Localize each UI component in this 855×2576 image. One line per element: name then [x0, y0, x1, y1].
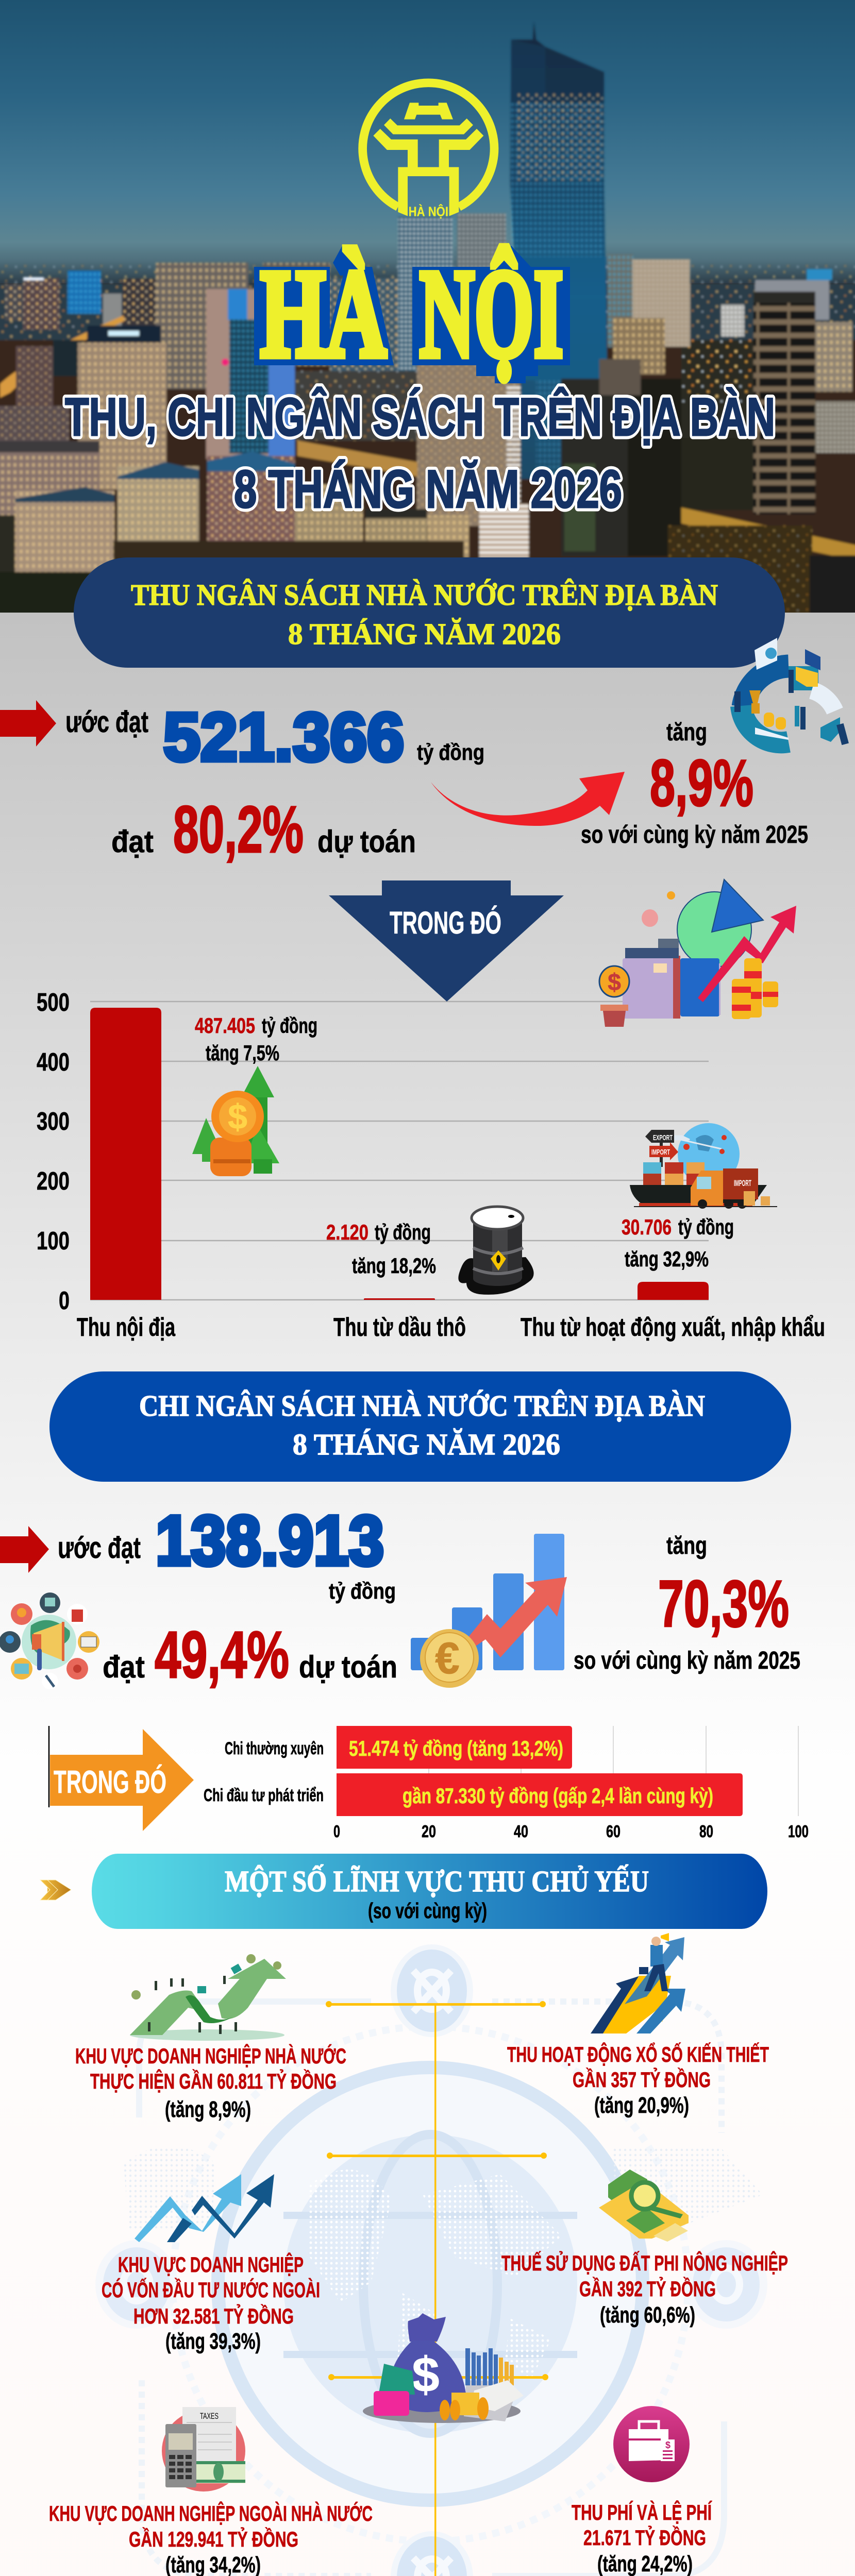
panel: key revenue heading pill [92, 1854, 767, 1929]
icon: import export ship, truck and globe: IMPORT [734, 1178, 751, 1188]
text: non-agricultural land tax: GẦN 392 TỶ ĐỒNG [579, 2276, 716, 2301]
title: Hà Nội: HÀ [260, 244, 387, 383]
x axis labels [333, 1822, 809, 1841]
number: 49,4%: 49,4% [155, 1618, 289, 1692]
arrow: TRONG ĐÓ orange: TRONG ĐÓ [54, 1765, 166, 1800]
value labels [195, 1013, 734, 1278]
text: non-state enterprises: GẦN 129.941 TỶ ĐỒNG [129, 2527, 298, 2551]
value labels: tỷ đồng [678, 1215, 734, 1239]
y axis labels: 200 [37, 1167, 70, 1195]
y axis labels: 500 [37, 989, 70, 1016]
text: foreign invested enterprises: HƠN 32.581 TỶ ĐỒNG [133, 2303, 294, 2328]
beige hotel [87, 326, 161, 346]
icon: import export ship, truck and globe: IMPORT [651, 1148, 670, 1157]
text: state enterprises: KHU VỰC DOANH NGHIỆP NHÀ NƯỚC [75, 2043, 346, 2068]
distant towers left [5, 284, 23, 320]
page background [0, 613, 855, 2576]
roads centre [295, 371, 417, 440]
icon: bar chart with euro coin [411, 1534, 567, 1688]
text: fees and charges: THU PHÍ VÀ LỆ PHÍ [572, 2500, 712, 2524]
icon: gold coin with green arrows [192, 1066, 279, 1176]
icon: gold chevrons [40, 1880, 71, 1900]
x axis labels: 40 [514, 1822, 528, 1841]
text: lottery revenue [507, 2041, 769, 2118]
value labels: tăng 18,2% [352, 1253, 436, 1278]
panel: revenue heading pill [74, 557, 785, 668]
foreground apartment blocks [0, 406, 69, 441]
text: non-agricultural land tax [501, 2250, 788, 2328]
value labels: 487.405 [195, 1013, 255, 1038]
text: fees and charges: (tăng 24,2%) [597, 2551, 693, 2576]
x axis labels: 100 [788, 1822, 809, 1841]
text: tỷ đồng: tỷ đồng [329, 1579, 396, 1604]
category labels [204, 1739, 324, 1805]
x axis labels [77, 1313, 825, 1342]
text: foreign invested enterprises: (tăng 39,3%) [165, 2329, 261, 2354]
category labels: Chi thường xuyên [225, 1739, 324, 1758]
icon: oil barrel and puddle [458, 1207, 534, 1295]
gridlines [90, 1002, 709, 1300]
watermark badges [95, 1944, 767, 2576]
icon: blue zigzag arrows [135, 2174, 274, 2242]
value labels: tăng 7,5% [206, 1041, 279, 1065]
icon: money bag centre [363, 2313, 524, 2423]
panel: expenditure heading pill: 8 THÁNG NĂM 2026 [293, 1428, 560, 1461]
panel: revenue heading pill: THU NGÂN SÁCH NHÀ NƯỚC TRÊN ĐỊA BÀN [131, 578, 718, 612]
icon: business team on ring chart [734, 638, 849, 745]
arrow: TRONG ĐÓ down arrow [329, 880, 564, 1002]
category labels: Chi đầu tư phát triển [204, 1786, 324, 1805]
icon: pink briefcase circle: $ [665, 2440, 670, 2450]
icon: bar chart with euro coin: € [435, 1634, 460, 1683]
bar value labels: gần 87.330 tỷ đồng (gấp 2,4 lần cùng kỳ) [403, 1784, 713, 1808]
twin glass towers [398, 217, 452, 402]
x axis labels: Thu từ dầu thô [333, 1313, 466, 1342]
bars [90, 1008, 161, 1300]
icon: import export ship, truck and globe [630, 1123, 777, 1209]
bar value labels [349, 1736, 713, 1808]
text: lottery revenue: GẦN 357 TỶ ĐỒNG [573, 2067, 711, 2092]
subtitle line 2: 8 THÁNG NĂM 2026 [234, 460, 622, 519]
value labels: tăng 32,9% [625, 1247, 709, 1271]
number: 138.913: 138.913 [156, 1501, 384, 1580]
text: non-state enterprises: KHU VỰC DOANH NGHIỆP NGOÀI NHÀ NƯỚC [49, 2501, 373, 2526]
icon: businessman on rising arrows [591, 1933, 685, 2033]
text: lottery revenue: (tăng 20,9%) [594, 2093, 689, 2118]
bar value labels: 51.474 tỷ đồng (tăng 13,2%) [349, 1736, 563, 1760]
right mid towers [608, 255, 633, 347]
icon: money bag centre: $ [412, 2347, 440, 2402]
text: ước đạt: ước đạt [58, 1531, 141, 1565]
icon: tax folder with magnifier [599, 2170, 689, 2242]
panel: expenditure heading pill: CHI NGÂN SÁCH NHÀ NƯỚC TRÊN ĐỊA BÀN [139, 1389, 705, 1422]
panel: revenue heading pill: 8 THÁNG NĂM 2026 [288, 617, 561, 651]
x axis labels: 80 [699, 1822, 713, 1841]
text: đạt: đạt [103, 1650, 145, 1684]
arrow: TRONG ĐÓ down arrow: TRONG ĐÓ [390, 905, 501, 940]
arrow: curved growth arrow [431, 772, 625, 826]
value labels: tỷ đồng [375, 1220, 431, 1244]
decorative axis [48, 1726, 49, 1807]
icon: pie chart, books and coins [599, 879, 796, 1027]
icon: green growth arrow [130, 1954, 286, 2041]
text: tỷ đồng: tỷ đồng [417, 740, 484, 765]
text: non-state enterprises [49, 2501, 373, 2576]
glass office [206, 289, 295, 459]
icon: megaphone on globe with circles [0, 1592, 99, 1689]
number: 8,9%: 8,9% [650, 747, 753, 820]
bar: chi đầu tư phát triển [337, 1773, 743, 1816]
logo: Hanoi emblem [363, 83, 494, 219]
icon: import export ship, truck and globe: EXPORT [653, 1133, 673, 1142]
text: ước đạt: ước đạt [65, 705, 148, 739]
title: Hà Nội [254, 244, 570, 383]
x axis labels: Thu nội địa [77, 1313, 176, 1342]
panel: expenditure heading pill [49, 1371, 791, 1482]
text: state enterprises [75, 2043, 346, 2122]
timeline: yellow connector lines [326, 2001, 548, 2576]
value labels: 2.120 [326, 1220, 368, 1244]
number: 521.366: 521.366 [163, 699, 404, 775]
dark right block [561, 379, 681, 556]
bar: chi thường xuyên [337, 1726, 572, 1769]
text: non-agricultural land tax: (tăng 60,6%) [600, 2302, 695, 2328]
arrow: TRONG ĐÓ orange [50, 1729, 194, 1831]
value labels: tỷ đồng [262, 1013, 317, 1038]
x axis labels: 60 [606, 1822, 621, 1841]
chart: expenditure horizontal bars [204, 1726, 809, 1841]
y axis labels: 100 [37, 1227, 70, 1255]
arrow: revenue bullet [0, 700, 56, 747]
emblem caption: HÀ NỘI [409, 204, 448, 219]
number: 80,2%: 80,2% [173, 793, 304, 867]
text: dự toán: dự toán [299, 1650, 397, 1684]
title: Hà Nội: NỘI [420, 244, 563, 383]
panel: key revenue heading pill: (so với cùng kỳ) [368, 1899, 487, 1923]
background: globe watermark [95, 1944, 767, 2576]
y axis labels: 0 [59, 1287, 70, 1315]
icon: tax receipt and card terminal: TAXES [200, 2411, 219, 2421]
text: fees and charges: 21.671 TỶ ĐỒNG [583, 2525, 706, 2550]
chart: revenue bar chart [37, 989, 825, 1342]
text: foreign invested enterprises [102, 2252, 320, 2354]
number: 70,3%: 70,3% [658, 1567, 789, 1641]
x axis labels: 20 [422, 1822, 436, 1841]
y axis labels [37, 989, 70, 1315]
icon: gold coin with green arrows: $ [228, 1097, 247, 1137]
text: fees and charges [572, 2500, 712, 2576]
icon: tax receipt and card terminal [162, 2407, 245, 2492]
text: state enterprises: THỰC HIỆN GẦN 60.811 TỶ ĐỒNG [90, 2069, 337, 2093]
icon: pink briefcase circle [613, 2406, 690, 2482]
text: foreign invested enterprises: KHU VỰC DOANH NGHIỆP [118, 2252, 304, 2277]
panel: key revenue heading pill: MỘT SỐ LĨNH VỰC THU CHỦ YẾU [225, 1865, 649, 1898]
text: foreign invested enterprises: CÓ VỐN ĐẦU TƯ NƯỚC NGOÀI [102, 2277, 320, 2302]
hero: Hanoi night skyline [0, 0, 855, 620]
main Landmark tower [510, 22, 607, 479]
skeleton tower [753, 292, 815, 514]
arrow: expenditure bullet [0, 1526, 49, 1573]
text: tăng: tăng [666, 719, 707, 746]
central beige tower [417, 361, 520, 526]
text: tăng: tăng [666, 1532, 707, 1560]
x axis labels: 0 [333, 1822, 340, 1841]
icon: pie chart, books and coins: $ [608, 969, 621, 995]
watermark frame lines [139, 2002, 724, 2576]
text: dự toán: dự toán [317, 824, 416, 859]
highway glow left [0, 315, 124, 398]
y axis labels: 300 [37, 1108, 70, 1136]
y axis labels: 400 [37, 1048, 70, 1076]
subtitle line 2: 8 THÁNG NĂM 2026 [234, 460, 622, 519]
text: đạt: đạt [111, 824, 154, 859]
value labels: 30.706 [622, 1215, 672, 1239]
text: state enterprises: (tăng 8,9%) [165, 2097, 251, 2122]
